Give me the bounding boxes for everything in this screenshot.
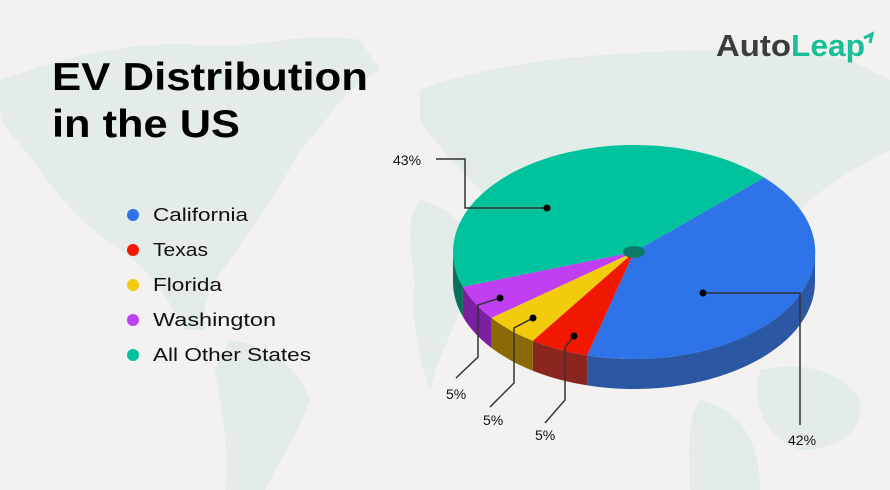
labels: 5% bbox=[446, 386, 466, 402]
legend: Washington bbox=[153, 310, 276, 330]
leaders bbox=[436, 159, 800, 425]
labels: 5% bbox=[535, 427, 555, 443]
labels: 5% bbox=[483, 412, 503, 428]
logo: AutoLeap: Auto bbox=[716, 28, 791, 63]
title bbox=[52, 56, 368, 146]
legend: All Other States bbox=[153, 345, 311, 365]
labels: 43% bbox=[393, 152, 421, 168]
pie chart bbox=[453, 145, 815, 389]
legend: California bbox=[153, 205, 249, 225]
logo: AutoLeap: Leap bbox=[791, 28, 865, 63]
logo: AutoLeap bbox=[716, 28, 872, 63]
title: in the US bbox=[52, 103, 240, 146]
legend: Florida bbox=[153, 275, 223, 295]
labels bbox=[393, 152, 816, 448]
labels: 42% bbox=[788, 432, 816, 448]
legend: Texas bbox=[153, 240, 208, 260]
title: EV Distribution bbox=[52, 56, 368, 99]
legend bbox=[127, 205, 311, 365]
